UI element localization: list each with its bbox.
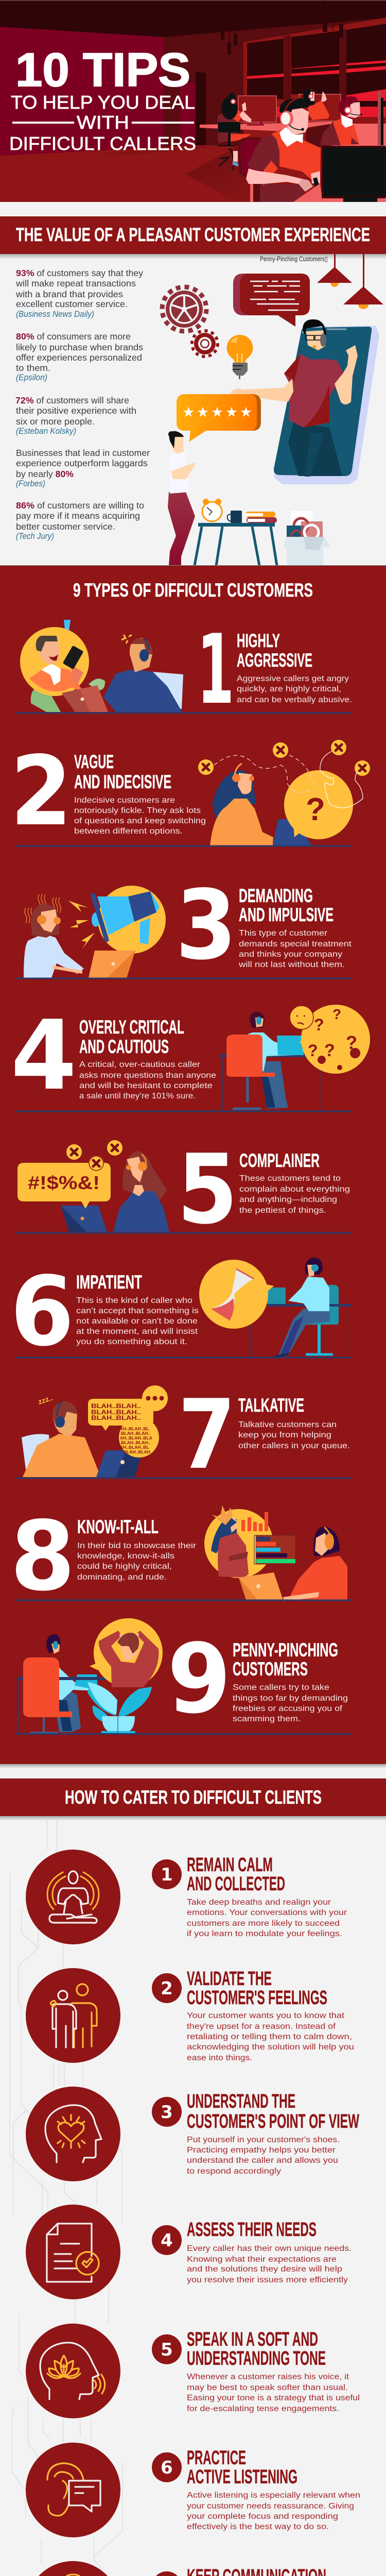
stat: outperform laggards: Businesses that lead in customer	[16, 448, 150, 458]
illustration: indecisive agent	[198, 740, 370, 845]
description: and can be verbally abusive.	[237, 696, 352, 704]
illustration: standing woman	[168, 431, 197, 566]
front monitor	[322, 146, 386, 202]
stat: 93 percent: 93% of customers say that they	[16, 268, 143, 278]
stat: 86 percent: (Tech Jury)	[16, 532, 54, 541]
description: freebies or accusing you of	[233, 1704, 343, 1713]
panel: 9 types of difficult customers	[0, 565, 386, 1769]
type 9: penny-pinching customers	[17, 1618, 348, 1735]
heading: speak	[187, 2329, 326, 2369]
heading: overly critical	[79, 1016, 184, 1057]
description: Some callers try to take	[233, 1683, 329, 1692]
heading: highly aggressive: AGGRESSIVE	[237, 650, 312, 671]
description	[187, 2244, 352, 2284]
number badge 3: 3	[161, 2102, 173, 2123]
desk and monitors	[200, 91, 386, 147]
illustration: bored agent and talkative caller: AH..BLAH..BL	[120, 1426, 149, 1431]
description: ease into things.	[187, 2054, 252, 2062]
number badge 7	[152, 2571, 182, 2576]
stat: 86 percent: pay more if it means acquiring	[16, 511, 140, 521]
description: retaliating or telling them to calm down,	[187, 2032, 352, 2041]
description: These customers tend to	[239, 1174, 341, 1183]
description	[187, 2491, 360, 2531]
description: will not last without them.	[238, 960, 345, 969]
description: and thinks your company	[239, 950, 342, 959]
title: WITH	[77, 112, 129, 133]
type 3: demanding and impulsive	[24, 869, 352, 981]
stat: outperform laggards: by nearly 80%	[16, 469, 74, 479]
description: the pettiest of things.	[239, 1206, 326, 1215]
description: acknowledging the solution will help you	[187, 2043, 354, 2052]
heading: demanding	[239, 885, 334, 925]
stat: 80 percent: (Epsilon)	[16, 373, 47, 382]
type 2: vague and indecisive	[10, 735, 370, 847]
number badge 2	[152, 1973, 182, 2003]
description: A critical, over-cautious caller	[79, 1060, 200, 1069]
back-right agent	[303, 89, 329, 120]
title: DIFFICULT CALLERS	[9, 133, 196, 154]
description	[74, 796, 206, 836]
tip 7: keep communication professional	[26, 2561, 344, 2576]
heading: practice: ACTIVE LISTENING	[187, 2466, 297, 2488]
description	[239, 1174, 350, 1215]
hero: call centre illustration	[0, 0, 386, 202]
description: Indecisive customers are	[74, 796, 175, 805]
description	[187, 1898, 347, 1938]
number badge 1	[152, 1859, 182, 1889]
heading: validate	[187, 1968, 327, 2009]
heading: remain calm: AND COLLECTED	[187, 1873, 285, 1895]
description: asks more questions than anyone	[79, 1071, 216, 1080]
illustration: hourglass and agent	[199, 1258, 351, 1358]
number badge 1: 1	[161, 1865, 173, 1885]
heading: validate: VALIDATE THE	[187, 1968, 272, 1990]
title	[9, 44, 196, 154]
heading: know-it-all: KNOW-IT-ALL	[77, 1516, 159, 1537]
stat: 80 percent: to them.	[16, 363, 50, 373]
illustration: customer service phone scene	[162, 254, 383, 566]
stat: outperform laggards: experience outperform laggards	[16, 458, 148, 468]
number 8: 8	[10, 1500, 75, 1612]
illustration: bored agent and talkative caller: .BLAH..BLAH..	[120, 1440, 150, 1445]
description: of questions and keep switching	[74, 817, 206, 825]
illustration: complaining bubble and agent: #!$%&!	[28, 1172, 100, 1193]
illustration: bored agent and talkative caller: BLAH..BLAH..	[91, 1415, 141, 1421]
description	[187, 2136, 340, 2176]
icon: light bulb	[227, 335, 253, 379]
illustration: bored agent and talkative caller: BLAH..BLAH	[124, 1449, 150, 1454]
decorative circuit lines	[10, 1818, 128, 2576]
title: TO HELP YOU DEAL	[11, 92, 195, 113]
front chair	[238, 138, 268, 202]
heading: vague: VAGUE	[74, 751, 114, 772]
icon: head with heart	[26, 2087, 120, 2181]
description: Active listening is especially relevant when	[187, 2491, 360, 2500]
stat: 93 percent: will make repeat transactions	[15, 278, 136, 289]
description: emotions. Your conversations with your	[187, 1908, 347, 1917]
type 7: talkative	[22, 1379, 350, 1490]
heading: highly aggressive: HIGHLY	[237, 630, 280, 651]
stat: outperform laggards: (Forbes)	[16, 479, 45, 488]
heading: remain calm	[187, 1854, 285, 1895]
description: other callers in your queue.	[238, 1442, 350, 1450]
icon: gears	[162, 287, 218, 357]
heading: practice	[187, 2447, 297, 2488]
heading: practice: PRACTICE	[187, 2447, 246, 2469]
description: Take deep breaths and realign your	[187, 1898, 331, 1907]
heading: demanding: AND IMPULSIVE	[239, 904, 334, 925]
stat: 86 percent: 86% of customers are willing to	[16, 500, 144, 511]
stat: outperform laggards	[16, 448, 150, 488]
type 8: know-it-all	[10, 1500, 347, 1612]
number 2: 2	[10, 735, 72, 847]
back-left agent	[218, 93, 252, 170]
description: Easing your tone is a strategy that is useful	[187, 2394, 360, 2402]
number 9: 9	[167, 1623, 231, 1735]
stat: 80 percent: 80% of consumers are more	[16, 331, 131, 342]
description: at the moment, and will insist	[76, 1327, 198, 1336]
illustration: bored agent and talkative caller	[22, 1385, 168, 1477]
illustration: bored agent and talkative caller: BLAH..BLAH..	[91, 1403, 141, 1410]
description: your complete focus and responding	[187, 2512, 338, 2521]
description: things too far by demanding	[233, 1694, 348, 1703]
description: can’t accept that something is	[76, 1307, 199, 1315]
description: Practicing empathy helps you better	[187, 2146, 336, 2155]
heading: complainer: COMPLAINER	[239, 1150, 320, 1171]
description: your customer needs reassurance. Giving	[187, 2502, 354, 2511]
heading: overly critical: AND CAUTIOUS	[79, 1036, 169, 1057]
icon: star rating bubble	[177, 394, 261, 442]
description: understand the caller and allows you	[187, 2156, 338, 2165]
illustration: megaphone agent	[24, 886, 166, 978]
illustration: cautious caller agent: ?	[332, 1006, 341, 1022]
number badge 4: 4	[161, 2230, 173, 2251]
stat: 93 percent: with a brand that provides	[15, 289, 123, 299]
stat: 93 percent	[15, 268, 143, 319]
tip 6: practice active listening	[26, 2443, 360, 2537]
heading: understand	[187, 2091, 359, 2132]
description	[187, 2011, 354, 2062]
number badge 6	[152, 2452, 182, 2482]
description: you resolve their issues more efficiently	[187, 2276, 348, 2284]
description: for de-escalating tense engagements.	[187, 2404, 339, 2413]
number badge 2: 2	[161, 1978, 173, 1999]
type 6: impatient	[10, 1256, 351, 1367]
heading: understand: UNDERSTAND THE	[187, 2091, 295, 2112]
illustration: bored agent and talkative caller: zzz..	[37, 1394, 54, 1406]
stat: 72 percent: six or more people.	[16, 416, 95, 427]
heading: demanding: DEMANDING	[239, 885, 313, 906]
description	[233, 1683, 348, 1723]
description: and the solutions they desire will help	[187, 2265, 342, 2274]
tip 3: understand point of view	[26, 2087, 359, 2181]
description	[238, 929, 352, 969]
description: to respond accordingly	[187, 2167, 281, 2176]
type 1: highly aggressive	[20, 614, 352, 725]
description	[76, 1296, 199, 1346]
number 5: 5	[177, 1133, 238, 1245]
icon: star rating bubble: ★★★★★	[182, 404, 252, 420]
heading: overly critical: OVERLY CRITICAL	[79, 1016, 184, 1038]
type 4: overly critical and cautious	[11, 999, 370, 1111]
number badge 4	[152, 2225, 182, 2255]
illustration: cautious caller agent: ?	[346, 1032, 357, 1053]
description: customers are more likely to succeed	[187, 1919, 340, 1928]
description: you do something about it.	[76, 1337, 187, 1346]
description: could be highly critical,	[77, 1562, 172, 1571]
number badge 5	[152, 2334, 182, 2364]
stat: 80 percent: offer experiences personalized	[16, 352, 142, 363]
stat: 93 percent: excellent customer service.	[16, 299, 128, 309]
description: not available or can't be done	[76, 1317, 198, 1326]
description: Aggressive callers get angry	[237, 674, 349, 683]
type 5: complainer	[17, 1133, 350, 1245]
number badge 5: 5	[161, 2340, 173, 2360]
description: In their bid to showcase their	[77, 1541, 196, 1550]
heading: highly aggressive	[237, 630, 312, 671]
illustration: box of gears	[283, 511, 331, 566]
tip 2: validate feelings	[26, 1968, 354, 2063]
heading: talkative: TALKATIVE	[238, 1395, 304, 1416]
illustration: complaining bubble and agent	[17, 1140, 169, 1232]
heading: vague	[74, 751, 171, 792]
stat: 86 percent: better customer service.	[16, 521, 115, 532]
description: effectively is the best way to do so.	[187, 2522, 329, 2531]
illustration: bored agent and talkative caller: AH..BLAH..BL	[120, 1445, 149, 1450]
description: dominating, and rude.	[77, 1573, 167, 1582]
description: between different options.	[74, 827, 183, 836]
icon: ear and speech bubble	[26, 2443, 120, 2537]
heading: penny-pinching	[233, 1639, 338, 1680]
panel: value of a pleasant customer experience	[0, 216, 386, 259]
description	[187, 2372, 360, 2413]
illustration: cautious caller agent: ?	[324, 1041, 335, 1060]
description: if you learn to modulate your feelings.	[187, 1929, 342, 1938]
illustration: cautious caller agent: ?	[314, 1015, 324, 1034]
stray label: Penny-Pinching Customers▯	[260, 255, 328, 263]
illustration: bored agent and talkative caller: AH..BLAH..BLA	[120, 1435, 152, 1440]
description: and anything—including	[239, 1195, 337, 1204]
description: complain about everything	[239, 1185, 350, 1194]
description: they're upset for a reason. Instead of	[187, 2022, 336, 2031]
description: demands special treatment	[239, 940, 352, 948]
number badge 6: 6	[161, 2458, 173, 2478]
illustration: know-it-all with crown and chart	[204, 1505, 347, 1601]
tip 5: soft and understanding tone	[26, 2324, 360, 2418]
icon: agent with headset	[26, 2561, 120, 2576]
stat: 80 percent: likely to purchase when brands	[16, 342, 143, 352]
heading: remain calm: REMAIN CALM	[187, 1854, 273, 1876]
description	[237, 674, 352, 704]
heading: impatient: IMPATIENT	[76, 1272, 142, 1293]
description: keep you from helping	[238, 1431, 331, 1439]
heading: penny-pinching: CUSTOMERS	[233, 1658, 308, 1680]
description: Every caller has their own unique needs.	[187, 2244, 352, 2253]
illustration: cautious caller agent: ?	[308, 1041, 318, 1060]
description: Your customer wants you to know that	[187, 2011, 345, 2020]
stat: 72 percent: (Esteban Kolsky)	[16, 427, 76, 436]
panel: how to cater heading	[0, 1778, 386, 1821]
number 3: 3	[176, 869, 237, 981]
illustration: cautious caller agent	[220, 1005, 370, 1110]
tip 4: assess their needs	[26, 2205, 352, 2299]
number badge 3	[152, 2097, 182, 2127]
description: knowledge, know-it-alls	[77, 1552, 174, 1561]
icon: ceiling lamps	[317, 254, 383, 309]
illustration: table with clock, cup and books	[195, 499, 277, 566]
right agent	[320, 96, 362, 145]
description: a sale until they’re 101% sure.	[79, 1092, 196, 1100]
stat: 93 percent: (Business News Daily)	[16, 310, 94, 319]
stat: 72 percent: their positive experience with	[16, 405, 136, 416]
number 1: 1	[197, 614, 234, 725]
number 7: 7	[178, 1379, 236, 1490]
heading: vague: AND INDECISIVE	[74, 771, 171, 792]
description	[238, 1420, 350, 1450]
number 6: 6	[10, 1256, 74, 1367]
description	[79, 1060, 216, 1100]
description	[77, 1541, 196, 1582]
number 4: 4	[11, 999, 77, 1111]
stat: 86 percent	[16, 500, 144, 541]
description: may be best to speak softer than usual.	[187, 2383, 348, 2392]
title: 10 TIPS	[15, 44, 190, 96]
icon: head with lotus and sound waves	[26, 2324, 120, 2418]
icon: document with check	[26, 2205, 120, 2299]
tip 1: remain calm and collected	[26, 1850, 347, 1944]
stat: 72 percent	[15, 395, 136, 436]
front agent	[246, 98, 323, 202]
description: This type of customer	[239, 929, 327, 938]
description: Talkative customers can	[238, 1420, 337, 1429]
description: This is the kind of caller who	[76, 1296, 192, 1305]
illustration: phone with agent	[230, 319, 379, 484]
description: and will be hesitant to complete	[79, 1081, 213, 1090]
illustration: angry caller and agent	[20, 620, 183, 712]
description: notoriously fickle. They ask lots	[74, 806, 201, 815]
icon: meditation	[26, 1850, 120, 1944]
illustration: penny-pinching caller and agent	[17, 1618, 163, 1734]
icon: speech bubble	[233, 274, 310, 327]
description: Whenever a customer raises his voice, it	[187, 2372, 349, 2381]
stat: 72 percent: 72% of customers will share	[15, 395, 129, 405]
description: quickly, are highly critical,	[237, 685, 341, 693]
illustration: bored agent and talkative caller: BLAH..BLAH..	[91, 1410, 141, 1416]
illustration: indecisive agent: ?	[306, 792, 325, 827]
stat: 80 percent	[16, 331, 143, 382]
description: scamming them.	[233, 1715, 301, 1723]
icon: two people	[26, 1968, 120, 2063]
illustration: bored agent and talkative caller: .BLAH..BLAH..	[120, 1431, 150, 1436]
description: Put yourself in your customer's shoes.	[187, 2136, 340, 2144]
description: Knowing what their expectations are	[187, 2255, 337, 2264]
